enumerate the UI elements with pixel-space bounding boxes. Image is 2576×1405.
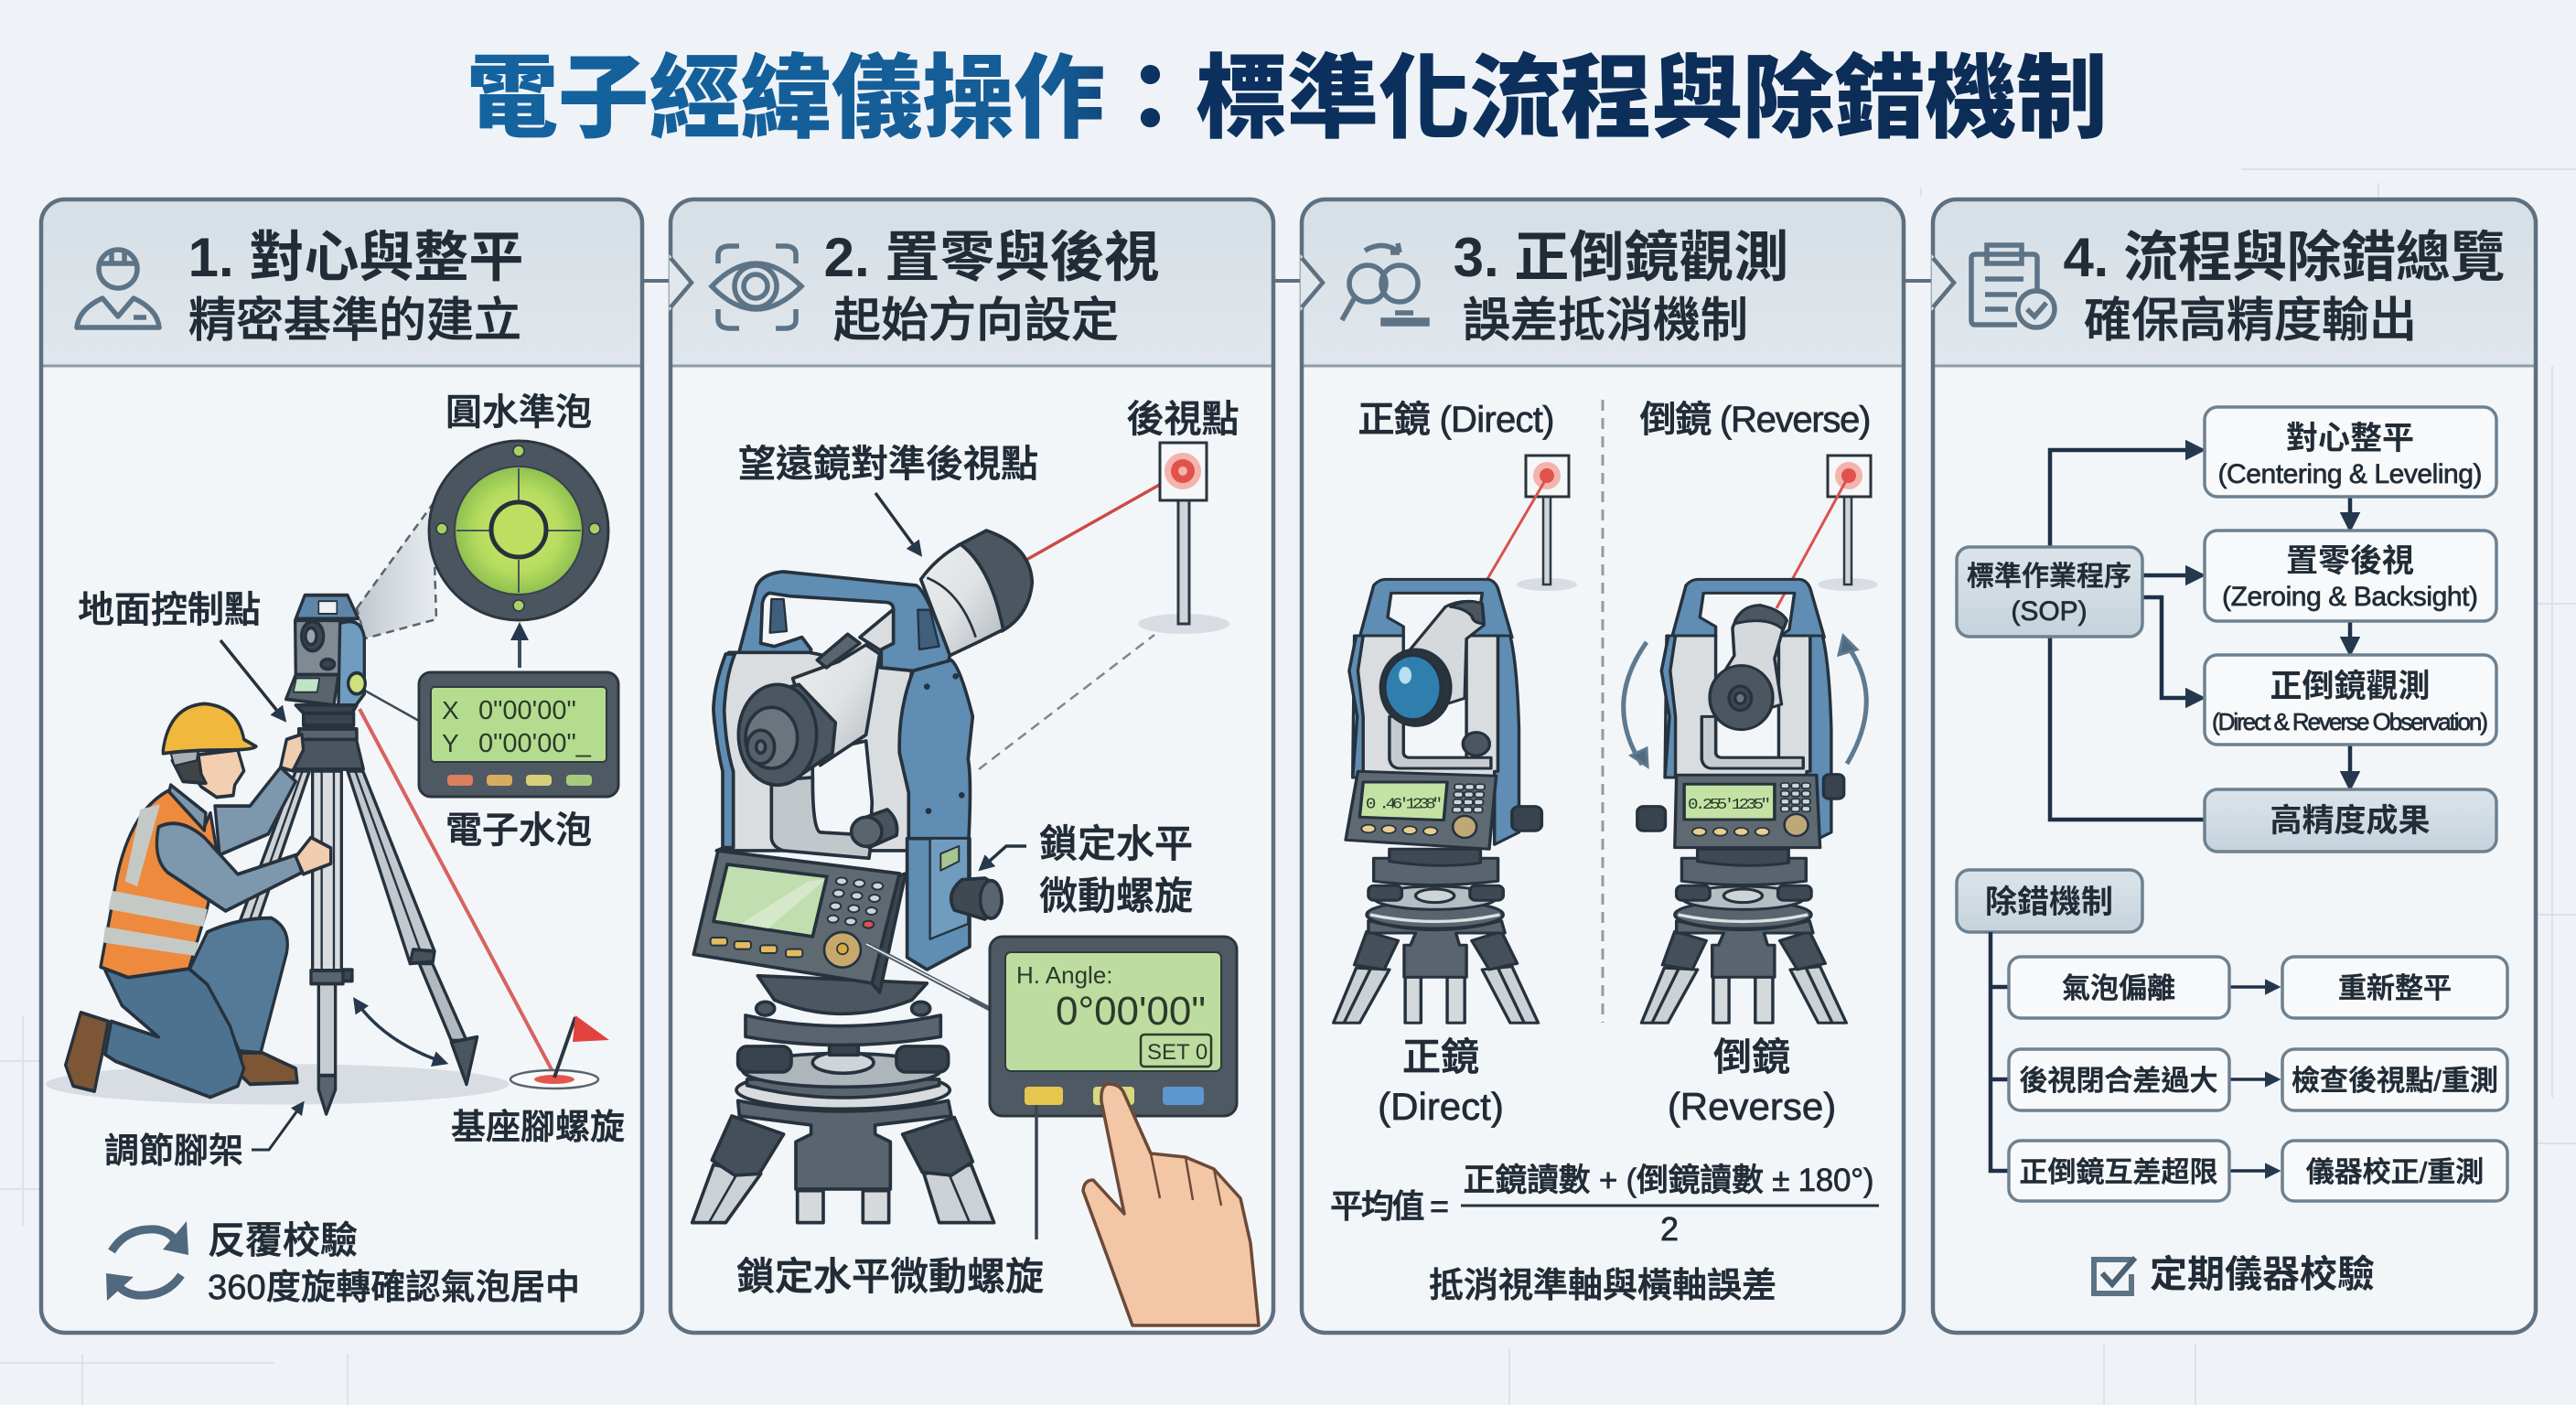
panel 3: direct and reverse: [1272, 199, 1904, 1333]
SOP box: [1957, 547, 2142, 637]
control point flag: [510, 1015, 609, 1089]
tripod legs: [212, 771, 478, 1114]
subheading 4: 確保高精度輸出: [2084, 295, 2417, 348]
electronic bubble display: Y: [442, 729, 459, 757]
telescope: [1405, 601, 1484, 704]
panel 4: overview: [1903, 199, 2536, 1333]
icon: check: [2094, 1258, 2135, 1293]
arrow: control point: [220, 640, 284, 720]
label: direct: (Direct): [1378, 1085, 1504, 1128]
icon: repeat: [106, 1221, 188, 1301]
leader: panel to display: [866, 944, 990, 1009]
subheading 2: 起始方向設定: [833, 295, 1119, 348]
arrow: bubble link: [518, 626, 521, 668]
label: fine screw (two lines): [1039, 822, 1193, 917]
debug header box: [1957, 870, 2142, 932]
sight lines: [1487, 477, 1848, 608]
direct theodolite: 0 .46'1238": [1366, 796, 1443, 813]
ground shadow: [46, 1064, 510, 1105]
yoke: [714, 652, 921, 851]
right arm: [899, 660, 972, 875]
zero-set display: 0°00'00": [1056, 989, 1206, 1034]
SOP box: 標準作業程序: [1967, 562, 2131, 592]
direct target: [1517, 456, 1577, 591]
mean formula: 平均值 =: [1330, 1187, 1449, 1225]
side knobs: [1637, 807, 1665, 831]
head: [738, 1100, 951, 1189]
SOP box: (SOP): [2011, 596, 2088, 627]
arm lower: [907, 839, 970, 970]
leader: button: [1035, 1105, 1038, 1239]
handle: [739, 572, 950, 670]
arrow: telescope: [875, 493, 920, 554]
rear barrel: [793, 645, 880, 766]
step: direct and reverse: (Direct & Reverse Observation): [2212, 708, 2488, 735]
reverse target: [1818, 456, 1878, 591]
instrument body: [286, 595, 365, 713]
near arm and hand: [156, 823, 302, 911]
knob: [866, 810, 897, 848]
safety vest: [101, 790, 218, 978]
label: lock horizontal fine screw: 鎖定水平微動螺旋: [736, 1255, 1044, 1298]
step: centering: 對心整平: [2286, 421, 2414, 456]
hand pointing: [1083, 1084, 1259, 1325]
step: direct and reverse: [2205, 655, 2496, 745]
label: direct: 正鏡: [1402, 1035, 1479, 1078]
electronic bubble display: [419, 672, 618, 797]
step: centering: [2205, 407, 2496, 497]
arrow: fine screw: [981, 846, 1026, 869]
arrow: adjust leg: [355, 1000, 445, 1063]
subheading 1: 精密基準的建立: [188, 295, 521, 348]
arrow: step 1 to 2: [640, 258, 692, 307]
label: 360 check: 360度旋轉確認氣泡居中: [208, 1269, 580, 1307]
debug row 3: 儀器校正/重測: [2306, 1156, 2484, 1188]
electronic bubble display: X: [442, 696, 459, 724]
legs: [692, 1164, 761, 1223]
label: reverse top: 倒鏡 (Reverse): [1639, 400, 1872, 440]
debug row 1: 重新整平: [2338, 972, 2452, 1004]
label: circular level: 圓水準泡: [445, 392, 592, 433]
reverse theodolite: [1637, 579, 1846, 1023]
fine screw: [951, 878, 1002, 919]
icon: clipboard: [1971, 245, 2055, 327]
heading 3: 3. 正倒鏡觀測: [1454, 227, 1788, 288]
divider: [1601, 400, 1605, 1023]
zero-set display: SET 0: [1147, 1040, 1208, 1065]
debug row 1: [2009, 957, 2507, 1018]
icon: eye: [712, 246, 801, 328]
zoom cone: [357, 504, 436, 638]
debug row 3: [2009, 1141, 2507, 1201]
debug row 2: [2009, 1049, 2507, 1110]
step: result: [2205, 789, 2496, 852]
arrow: step 2 to 3: [1272, 258, 1323, 307]
debug header box: 除錯機制: [1985, 885, 2113, 920]
control panel: [871, 874, 906, 992]
label: fine screw (two lines): 微動螺旋: [1039, 874, 1193, 917]
step: zeroing: (Zeroing & Backsight): [2222, 582, 2478, 612]
label: backsight: 後視點: [1127, 398, 1239, 440]
direct theodolite: [1334, 579, 1541, 1023]
label: adjust tripod: 調節腳架: [104, 1132, 243, 1171]
arrow: step 3 to 4: [1903, 258, 1954, 307]
far arm and hand: [215, 767, 295, 855]
backsight target: [1138, 443, 1229, 634]
icon: surveyor: [77, 250, 159, 327]
zero-set display: H. Angle:: [1016, 961, 1113, 989]
debug row 1: 氣泡偏離: [2062, 972, 2175, 1004]
arrow: tripod callout: [252, 1103, 303, 1150]
label: control point: 地面控制點: [78, 590, 261, 630]
panel 1: centering and leveling: [41, 199, 642, 1333]
step: zeroing: [2205, 531, 2496, 621]
label: cancels errors: 抵消視準軸與橫軸誤差: [1429, 1267, 1776, 1305]
step: zeroing: 置零後視: [2286, 543, 2414, 579]
electronic bubble display: 0"00'00"_: [478, 729, 592, 758]
heading 1: 1. 對心與整平: [188, 227, 523, 288]
mean formula: 2: [1660, 1210, 1679, 1248]
trousers and boots: [66, 1013, 108, 1091]
title: 電子經緯儀操作：標準化流程與除錯機制: [467, 48, 2108, 150]
control panel: [1675, 775, 1820, 848]
heading 4: 4. 流程與除錯總覽: [2064, 227, 2505, 288]
red plumb line: [360, 709, 554, 1075]
electronic bubble display: 0"00'00": [478, 696, 576, 725]
debug row 2: 後視閉合差過大: [2020, 1065, 2217, 1097]
label: reverse: (Reverse): [1668, 1085, 1836, 1128]
large theodolite lower: [692, 839, 1002, 1223]
label: foot screw: 基座腳螺旋: [451, 1109, 625, 1147]
reverse theodolite: 0.255'1235": [1688, 797, 1771, 814]
large theodolite upper: [714, 531, 1032, 875]
label: direct: [1378, 1035, 1504, 1128]
telescope: [1712, 606, 1785, 716]
backsight line of sight: [1026, 479, 1169, 560]
icon: circular bubble level: [429, 441, 608, 620]
SOP connectors: [2050, 450, 2350, 820]
right side knob: [1512, 807, 1541, 831]
tripod head: [295, 733, 363, 769]
objective: [860, 606, 930, 659]
label: fine screw (two lines): 鎖定水平: [1039, 822, 1193, 865]
label: electronic bubble: 電子水泡: [445, 810, 592, 851]
debug connectors: [1991, 932, 2278, 1171]
debug row 2: 檢查後視點/重測: [2292, 1065, 2498, 1097]
label: reverse: [1668, 1035, 1836, 1128]
label: periodic calibration: 定期儀器校驗: [2150, 1253, 2375, 1295]
control panel: [1346, 771, 1497, 849]
head and helmet: [163, 703, 256, 831]
step: result: 高精度成果: [2270, 803, 2431, 839]
heading 2: 2. 置零與後視: [824, 227, 1159, 288]
label: direct top: 正鏡 (Direct): [1358, 400, 1555, 440]
step: centering: (Centering & Leveling): [2217, 459, 2483, 489]
mean formula: [1330, 1163, 1879, 1248]
subheading 3: 誤差抵消機制: [1463, 295, 1748, 348]
debug row 3: 正倒鏡互差超限: [2020, 1156, 2217, 1188]
label: telescope: 望遠鏡對準後視點: [738, 443, 1038, 485]
step: direct and reverse: 正倒鏡觀測: [2270, 669, 2431, 704]
label: repeat check: 反覆校驗: [208, 1219, 358, 1261]
mean formula: 正鏡讀數 + (倒鏡讀數 ± 180°): [1464, 1163, 1873, 1198]
surveyor, tripod and small instrument: [46, 595, 510, 1114]
zero-set display: [990, 937, 1237, 1116]
label: reverse: 倒鏡: [1713, 1035, 1790, 1078]
icon: magnifier pair: [1342, 243, 1427, 324]
panel 2: zeroing and backsight: [640, 199, 1273, 1333]
rotation arrows: [1624, 636, 1866, 767]
